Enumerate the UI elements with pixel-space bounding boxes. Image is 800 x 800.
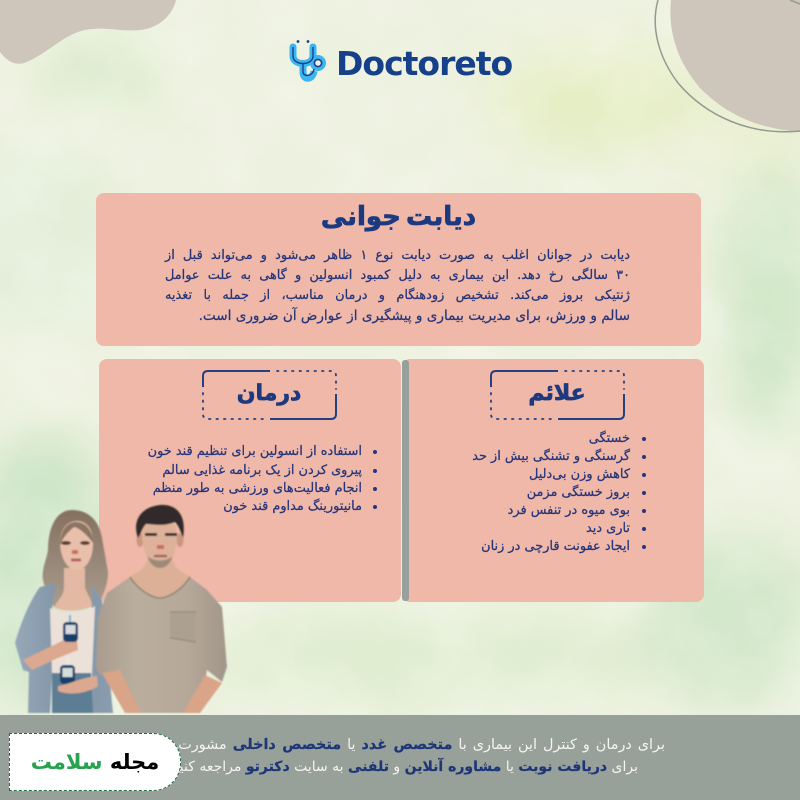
footer text: برای درمان و کنترل این بیماری با متخصص غدد یا متخصص داخلی مشورت bbox=[178, 737, 665, 753]
intro paragraph bbox=[164, 248, 630, 324]
symptoms list: ایجاد عفونت قارچی در زنان bbox=[481, 539, 630, 554]
symptoms list: گرسنگی و تشنگی بیش از حد bbox=[472, 449, 630, 464]
treatment list: استفاده از انسولین برای تنظیم قند خون bbox=[148, 444, 362, 459]
treatment list: انجام فعالیت‌های ورزشی به طور منظم bbox=[153, 481, 362, 496]
logo: Doctoreto bbox=[290, 40, 512, 83]
symptoms list: تاری دید bbox=[586, 521, 630, 536]
footer text bbox=[172, 737, 665, 775]
symptoms list bbox=[472, 430, 646, 554]
footer bar bbox=[0, 715, 800, 800]
illustration: couple with glucose meters bbox=[14, 504, 228, 714]
heading box: symptoms bbox=[490, 370, 625, 420]
heading box: symptoms: علائم bbox=[528, 381, 586, 406]
panel: symptoms bbox=[402, 359, 704, 602]
footer text: برای دریافت نوبت یا مشاوره آنلاین و تلفنی به سایت دکترتو مراجعه کنید bbox=[172, 759, 638, 775]
intro paragraph: دیابت در جوانان اغلب به صورت دیابت نوع ۱ ظاهر می‌شود و می‌تواند قبل از bbox=[165, 248, 630, 263]
woman bbox=[15, 510, 113, 713]
treatment list: پیروی کردن از یک برنامه غذایی سالم bbox=[162, 463, 362, 478]
panel: treatment bbox=[99, 359, 401, 602]
man bbox=[96, 505, 227, 713]
panel: introduction bbox=[96, 193, 701, 346]
badge: health magazine: مجله سلامت bbox=[31, 750, 159, 774]
treatment list bbox=[148, 444, 377, 514]
shape: top right blob with outline bbox=[654, 0, 800, 132]
logo wordmark: Doctoreto bbox=[336, 44, 512, 83]
symptoms list: بوی میوه در تنفس فرد bbox=[508, 503, 630, 518]
symptoms list: کاهش وزن بی‌دلیل bbox=[529, 467, 630, 482]
intro paragraph: ۳۰ سالگی رخ دهد. این بیماری به دلیل کمبود انسولین و گاهی به علت عوامل bbox=[165, 268, 630, 283]
divider bar bbox=[402, 360, 409, 601]
treatment list: مانیتورینگ مداوم قند خون bbox=[223, 499, 362, 514]
heading box: treatment bbox=[202, 370, 337, 420]
heading: juvenile diabetes: دیابت جوانی bbox=[321, 202, 476, 232]
heading box: treatment: درمان bbox=[237, 381, 301, 406]
shape: top left blob bbox=[0, 0, 176, 64]
intro paragraph: ژنتیکی بروز می‌کند. تشخیص زودهنگام و درمان مناسب، از جمله با تغذیه bbox=[165, 288, 630, 303]
badge: health magazine bbox=[9, 733, 181, 791]
symptoms list: خستگی bbox=[589, 431, 630, 446]
intro paragraph: سالم و ورزش، برای مدیریت بیماری و پیشگیری از عوارض آن ضروری است. bbox=[199, 308, 630, 324]
symptoms list: بروز خستگی مزمن bbox=[527, 485, 630, 500]
icon: stethoscope bbox=[290, 40, 326, 82]
